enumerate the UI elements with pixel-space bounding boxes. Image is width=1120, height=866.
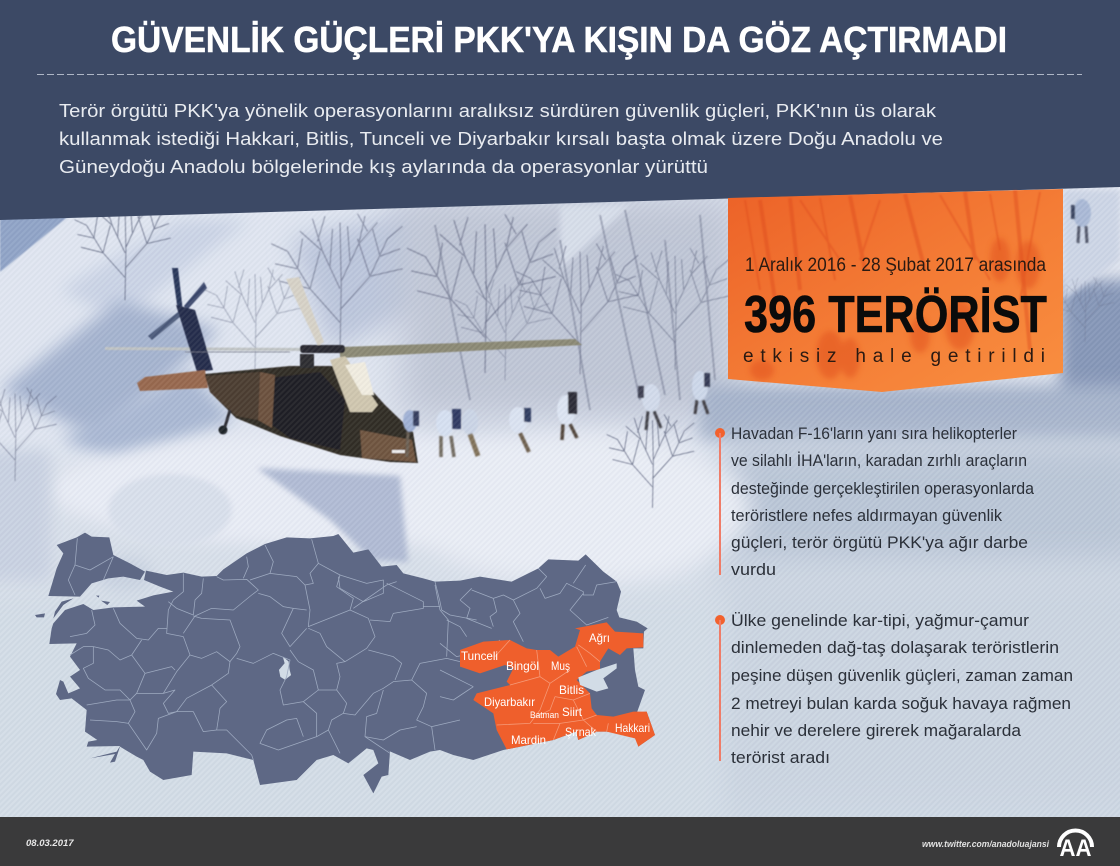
background trees	[0, 198, 1114, 508]
Gallipoli and islands	[35, 596, 110, 618]
province borders	[68, 538, 617, 760]
bullet text 1: teröristlere nefes aldırmayan güvenlik	[731, 506, 1002, 525]
soldiers in snow camouflage	[403, 199, 1091, 457]
bullet text 1: güçleri, terör örgütü PKK'ya ağır darbe	[731, 533, 1028, 552]
province labels: Hakkari	[615, 721, 650, 735]
footer bar	[0, 817, 1120, 866]
intro paragraph: Terör örgütü PKK'ya yönelik operasyonlarını aralıksız sürdüren güvenlik güçleri, PKK'nın üs olarak	[59, 101, 937, 121]
province labels: Şırnak	[565, 725, 597, 739]
diagonal hatch overlay	[0, 180, 1120, 820]
bullet text 2: peşine düşen güvenlik güçleri, zaman zaman	[731, 666, 1073, 685]
bullet text 2: terörist aradı	[731, 748, 830, 767]
header band	[0, 0, 1120, 220]
helicopter	[105, 268, 582, 463]
province labels: Diyarbakır	[484, 695, 535, 709]
bullet text 1: vurdu	[731, 560, 776, 579]
big number: 396 TERÖRİST	[744, 286, 1047, 344]
Lake Van	[578, 663, 617, 692]
bullet text 1: desteğinde gerçekleştirilen operasyonlarda	[731, 479, 1035, 498]
province labels	[461, 631, 650, 747]
province labels: Siirt	[562, 705, 583, 719]
date: 08.03.2017	[26, 838, 74, 849]
province labels: Tunceli	[461, 649, 498, 663]
orange callout: 396 terrorists	[728, 189, 1063, 392]
province labels: Bitlis	[559, 683, 584, 697]
intro paragraph: kullanmak istediği Hakkari, Bitlis, Tunceli ve Diyarbakır kırsalı başta olmak üzere Doğu Anadolu ve	[59, 129, 943, 149]
photo background: snowy mountain scene	[0, 180, 1120, 840]
bullet text 2	[715, 611, 1073, 767]
icon: AA logo: AA	[1060, 835, 1092, 862]
bullet text 2: Ülke genelinde kar-tipi, yağmur-çamur	[731, 611, 1029, 630]
map of Turkey	[35, 533, 655, 793]
neutralised line: etkisiz hale getirildi	[743, 346, 1045, 367]
bullet marker	[715, 615, 725, 761]
bullet text 1: ve silahlı İHA'ların, karadan zırhlı araçların	[731, 451, 1027, 470]
province labels: Mardin	[511, 733, 546, 747]
date line: 1 Aralık 2016 - 28 Şubat 2017 arasında	[745, 255, 1046, 276]
title: GÜVENLİK GÜÇLERİ PKK'YA KIŞIN DA GÖZ AÇTIRMADI	[111, 19, 1007, 60]
twitter address: www.twitter.com/anadoluajansi	[922, 839, 1049, 850]
bullet text 2: 2 metreyi bulan karda soğuk havaya rağmen	[731, 694, 1071, 713]
province labels: Bingöl	[506, 659, 539, 673]
highlighted provinces	[460, 622, 655, 749]
province labels: Muş	[551, 659, 570, 673]
province labels: Ağrı	[589, 631, 610, 645]
landmass	[49, 534, 655, 793]
intro paragraph	[59, 101, 943, 177]
intro paragraph: Güneydoğu Anadolu bölgelerinde kış aylarında da operasyonlar yürüttü	[59, 157, 708, 177]
province labels: Batman	[530, 710, 559, 721]
Thrace	[48, 533, 145, 597]
bullet text 1: Havadan F-16'ların yanı sıra helikopterler	[731, 424, 1017, 443]
bullet text 2: nehir ve derelere girerek mağaralarda	[731, 721, 1022, 740]
bullet text 1	[715, 424, 1035, 579]
bullet text 2: dinlemeden dağ-taş dolaşarak teröristlerin	[731, 638, 1059, 657]
bullet marker	[715, 428, 725, 575]
Lake Tuz	[279, 657, 291, 679]
